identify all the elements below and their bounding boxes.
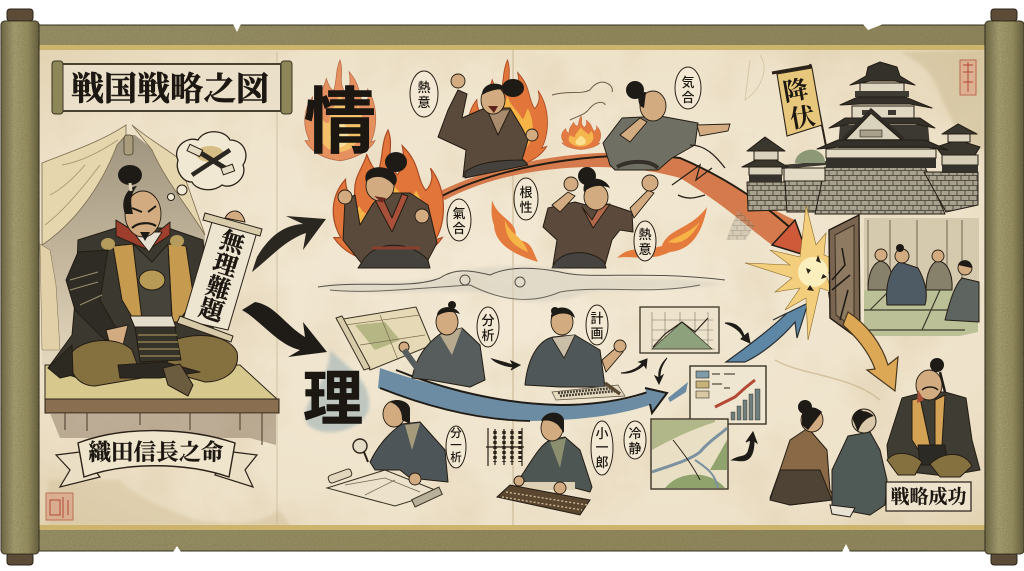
speech bubble: 根性: 性	[519, 200, 533, 215]
label: strategic success: 戦略成功	[890, 486, 967, 508]
speech bubble: 気合 top	[675, 67, 701, 109]
cloud divider	[318, 266, 725, 302]
figure: man in grey pointing	[603, 81, 730, 170]
impact burst	[745, 205, 842, 340]
speech bubble: 根性	[514, 178, 538, 220]
speech bubble: 分一析: 分	[450, 428, 462, 440]
speech bubble: 分析	[477, 307, 499, 347]
speech bubble: 計画	[586, 305, 608, 345]
hand on knee	[106, 325, 128, 345]
dais	[45, 365, 279, 445]
figure: scholar with map	[336, 301, 485, 387]
small tree	[795, 150, 825, 163]
red collar and head	[116, 220, 170, 250]
foot	[163, 364, 193, 396]
speech bubble: 気合 top: 気	[681, 75, 695, 90]
broken door	[829, 215, 860, 340]
label: strategic success	[886, 482, 971, 511]
speech bubble: 冷静: 冷	[628, 426, 642, 441]
scroll text	[196, 226, 250, 328]
figure: brown retainer kneeling	[770, 400, 833, 505]
title text: 戦国戦略之図	[71, 71, 269, 108]
side flames	[492, 200, 707, 262]
speech bubble: 分析: 分	[481, 313, 495, 328]
Nobunaga on dais	[45, 165, 279, 445]
bottom brocade border	[38, 525, 986, 552]
small arrow: analysis to plan	[492, 359, 520, 370]
speech bubble: 根性: 根	[519, 185, 533, 200]
speech bubble: 熱意: 熱	[417, 80, 431, 95]
smoke lines	[552, 82, 612, 120]
figure: angry man lower left	[338, 152, 437, 268]
figure: grey retainer kneeling	[830, 409, 887, 517]
small arrow: map to report	[732, 432, 757, 461]
main keep	[817, 62, 948, 168]
speech bubble: 気合 top: 合	[681, 90, 695, 105]
hakama knees	[70, 340, 142, 386]
small abacus	[486, 428, 524, 466]
speech bubble: 計画: 計	[590, 311, 604, 326]
small arrow: chart down	[655, 358, 667, 384]
room with bowing retainers	[864, 218, 979, 336]
thought bubble: crossed scroll and brush	[168, 132, 246, 200]
speech bubble: 小一郎: 一	[595, 440, 609, 455]
small arrow: chart to doc	[725, 323, 750, 343]
small seated retainer right	[926, 250, 952, 290]
speech bubble: 熱意 lower	[634, 221, 656, 261]
figure: planner	[525, 307, 626, 400]
figure: scholar with magnifier	[327, 400, 448, 507]
right tower	[936, 124, 980, 173]
motion lines near red arrow	[672, 145, 725, 198]
small seated retainer left	[868, 249, 893, 290]
speech bubble: 小一郎	[591, 421, 613, 475]
speech bubble: 冷静	[624, 421, 646, 459]
speech bubble: 分一析	[446, 426, 466, 468]
speech bubble: 熱意	[410, 71, 438, 117]
armor chest	[113, 244, 194, 322]
man viewed from side	[945, 260, 979, 322]
arrow: black to reason	[242, 302, 327, 357]
surrender banner	[772, 64, 826, 146]
speech bubble: 小一郎: 小	[595, 426, 609, 441]
kanji: passion: 情	[304, 63, 376, 168]
speech bubble: 氣合	[447, 199, 471, 241]
right scroll roller	[985, 9, 1024, 565]
figure: clerk with abacus	[497, 413, 592, 515]
flames behind upper figures	[333, 60, 601, 264]
banner text	[781, 75, 817, 134]
scroll text: 無	[217, 226, 250, 260]
speech bubble: 氣合: 合	[452, 221, 466, 236]
stone walls	[747, 182, 787, 211]
tent curtains	[40, 125, 205, 365]
left armored arm	[66, 250, 120, 340]
report box	[690, 366, 766, 424]
red passion arrow	[432, 153, 808, 256]
scroll text: 理	[210, 249, 241, 282]
title scroll	[52, 61, 292, 114]
red seal right	[960, 60, 976, 95]
speech bubble: 冷静: 静	[628, 441, 642, 456]
speech bubble: 分析: 析	[481, 328, 495, 343]
chart box	[640, 307, 719, 353]
robe and cape	[48, 228, 215, 382]
blue arrow upper segment	[668, 303, 808, 402]
small arrow: to chart	[621, 359, 647, 373]
speech bubble: 熱意: 意	[417, 95, 431, 110]
belt and armor skirt	[130, 316, 176, 328]
figure: man with raised hands	[543, 167, 658, 268]
bowing man	[887, 244, 926, 305]
speech bubble: 分一析: 一	[450, 440, 462, 452]
speech bubble: 計画: 画	[590, 326, 604, 341]
map box	[651, 419, 728, 489]
speech bubble: 氣合: 氣	[452, 206, 466, 221]
speech bubble: 分一析: 析	[450, 451, 462, 464]
stone rubble under arrow	[726, 210, 755, 240]
scroll parchment	[38, 48, 986, 528]
top brocade border	[38, 23, 986, 50]
left scroll roller	[1, 9, 39, 565]
figure: victorious lord	[887, 358, 980, 477]
castle	[742, 62, 980, 214]
speech bubble: 熱意 lower: 熱	[638, 227, 652, 242]
blue reason arrow	[378, 368, 667, 421]
golden arrow to success	[843, 312, 898, 391]
scroll text: 題	[196, 294, 229, 328]
ribbon text: 織田信長之命	[88, 440, 224, 465]
banner text: 降	[781, 75, 810, 107]
speech bubble: 小一郎: 郎	[595, 455, 609, 470]
left tower	[742, 137, 788, 182]
arrow: black to passion	[252, 216, 326, 272]
speech bubble: 熱意 lower: 意	[638, 242, 652, 257]
scroll: unreasonable order	[177, 211, 262, 342]
kanji: reason: 理	[303, 351, 363, 438]
scroll text: 難	[203, 272, 234, 305]
figure: angry man top centre	[438, 74, 538, 178]
ribbon: Oda Nobunaga's order	[56, 431, 257, 487]
red seal left	[46, 493, 73, 520]
banner text: 伏	[788, 102, 817, 134]
